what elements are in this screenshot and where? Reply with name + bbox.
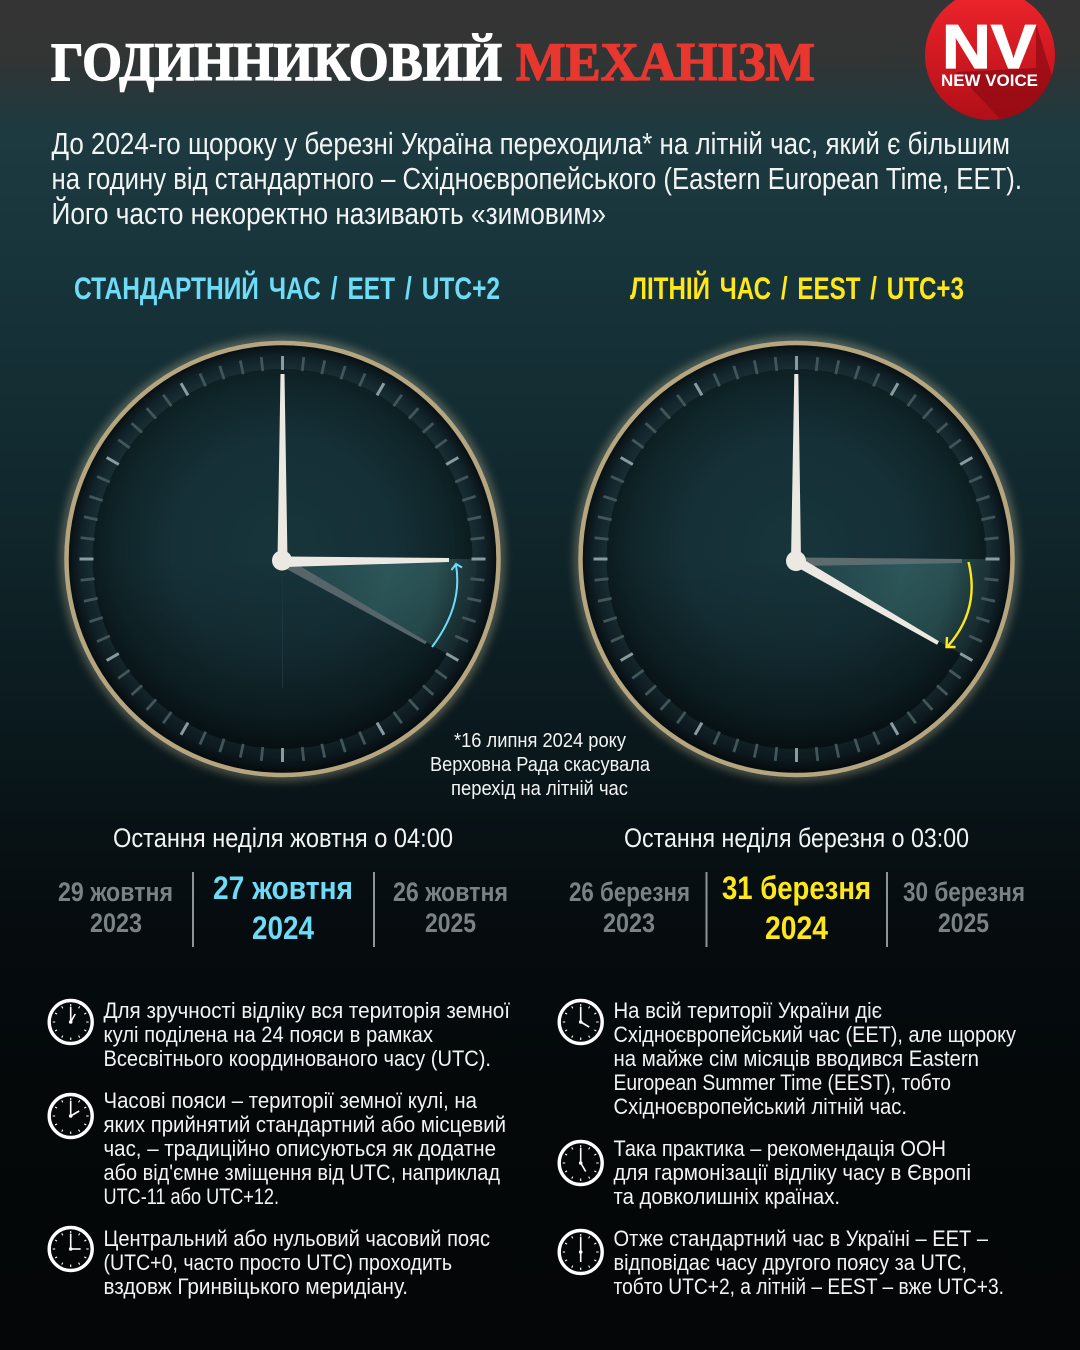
grey previous hand <box>804 558 962 566</box>
date block: October: Остання неділя жовтня о 04:00 <box>113 823 453 853</box>
text block: left 1 <box>104 998 511 1071</box>
text block: left 2 <box>104 1088 506 1209</box>
text block: right 2: та довколишніх країнах. <box>614 1184 840 1209</box>
date block: March: Остання неділя березня о 03:00 <box>624 823 969 853</box>
text block: left 3: вздовж Гринвіцького меридіану. <box>104 1274 408 1299</box>
text block: left 1: Для зручності відліку вся територія земної <box>104 998 511 1023</box>
date block: March <box>569 823 1025 947</box>
intro text: Його часто некоректно називають «зимовим» <box>52 195 606 231</box>
text block: right 1: Східноєвропейський літній час. <box>614 1094 907 1119</box>
clock: summer time <box>580 342 1014 776</box>
text block: right 3: Отже стандартний час в Україні – ЕЕТ – <box>614 1226 988 1251</box>
arrow: yellow <box>946 562 972 647</box>
date block: March: 2023 <box>603 908 655 938</box>
text block: left 2: або від'ємне зміщення від UTC, наприклад <box>104 1160 500 1185</box>
date block: October: 27 жовтня <box>213 870 353 906</box>
icon: clock 5 o'clock <box>559 1142 602 1184</box>
icon: clock 6 o'clock <box>559 1230 602 1274</box>
text block: left 1: кулі поділена на 24 пояси в рамках <box>104 1022 434 1047</box>
logo: NV New Voice <box>925 0 1055 120</box>
logo: NV New Voice: NEW VOICE <box>941 71 1038 90</box>
footnote: Верховна Рада скасувала <box>430 753 651 776</box>
intro text <box>52 126 1022 231</box>
text block: left 2: Часові пояси – території земної кулі, на <box>104 1088 477 1113</box>
date block: March: 31 березня <box>722 870 871 906</box>
icon: clock 3 o'clock <box>49 1228 92 1270</box>
date block: October: 2023 <box>90 908 142 938</box>
text block: right 1 <box>614 998 1017 1119</box>
text block: right 3 <box>614 1226 1004 1299</box>
title <box>51 32 815 92</box>
footnote: *16 липня 2024 року <box>454 729 627 752</box>
date block: October: 2025 <box>425 908 476 938</box>
text block: left 2: час, – традиційно описуються як додатне <box>104 1136 496 1161</box>
footnote <box>430 729 651 800</box>
title: МЕХАНІЗМ <box>516 32 815 92</box>
text block: right 1: European Summer Time (EEST), тобто <box>614 1070 951 1095</box>
text block: right 2 <box>614 1136 971 1209</box>
footnote: перехід на літній час <box>451 777 628 800</box>
text block: right 3: тобто UTC+2, а літній – EEST – вже UTC+3. <box>614 1274 1004 1299</box>
date block: March: 2024 <box>765 910 828 946</box>
text block: right 1: на майже сім місяців вводився Eastern <box>614 1046 979 1071</box>
icon: clock 2 o'clock <box>49 1094 92 1138</box>
hub <box>786 551 806 571</box>
text block: left 3: Центральний або нульовий часовий пояс <box>104 1226 490 1251</box>
text block: left 1: Всесвітнього координованого часу (UTC). <box>104 1046 491 1071</box>
heading: summer time: ЛІТНІЙ ЧАС / EEST / UTC+3 <box>630 270 964 306</box>
icon: clock 4 o'clock <box>559 1000 602 1044</box>
text block: left 3 <box>104 1226 490 1299</box>
minute hand <box>278 374 288 560</box>
hour hand <box>794 556 939 645</box>
arrow: cyan <box>432 564 462 647</box>
date block: October: 29 жовтня <box>58 877 173 907</box>
date block: March: 2025 <box>938 908 989 938</box>
clock: standard time <box>66 342 500 776</box>
text block: right 2: для гармонізації відліку часу в Європі <box>614 1160 971 1185</box>
text block: left 2: яких прийнятий стандартний або місцевий <box>104 1112 506 1137</box>
grey previous hand <box>280 557 427 644</box>
text block: left 2: UTC-11 або UTC+12. <box>104 1184 279 1209</box>
title: ГОДИННИКОВИЙ <box>51 32 502 92</box>
date block: October <box>58 823 508 947</box>
minute hand <box>791 374 801 560</box>
text block: right 1: Східноєвропейський час (EET), але щороку <box>614 1022 1017 1047</box>
text block: right 2: Така практика – рекомендація ООН <box>614 1136 946 1161</box>
date block: March: 26 березня <box>569 877 690 907</box>
text block: right 1: На всій території України діє <box>614 998 882 1023</box>
icon: clock 1 o'clock <box>49 1000 92 1044</box>
text block: left 3: (UTC+0, часто просто UTC) проходить <box>104 1250 452 1275</box>
hub <box>272 550 292 570</box>
date block: October: 26 жовтня <box>393 877 508 907</box>
date block: October: 2024 <box>252 910 314 946</box>
text block: right 3: відповідає часу другого поясу за UTC, <box>614 1250 967 1275</box>
heading: standard time: СТАНДАРТНИЙ ЧАС / EET / UTC+2 <box>74 270 500 306</box>
date block: March: 30 березня <box>903 877 1025 907</box>
logo: NV New Voice: NV <box>942 13 1036 82</box>
hour hand <box>285 556 449 567</box>
